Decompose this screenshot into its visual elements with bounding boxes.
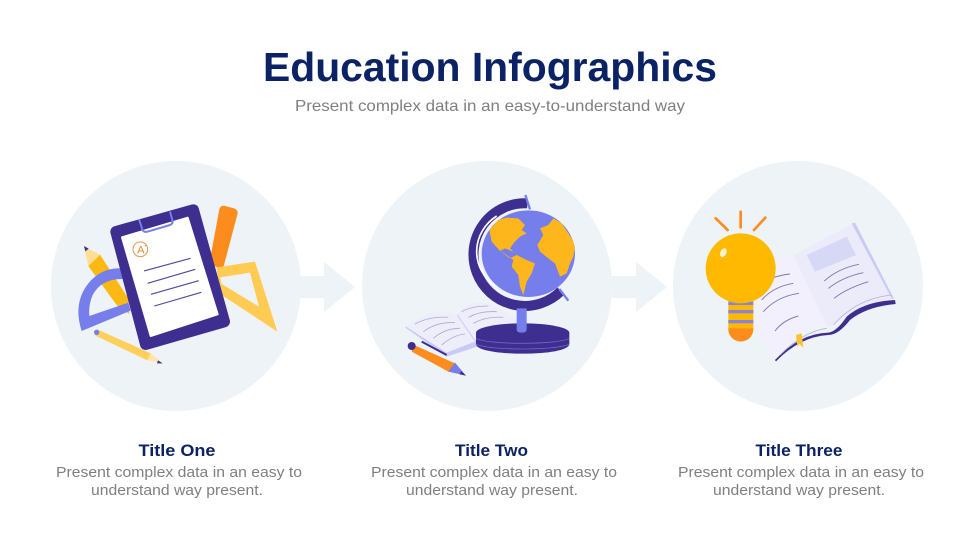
circle background one bbox=[51, 161, 301, 411]
text block: title two bbox=[371, 441, 617, 499]
text block: title one: understand way present. bbox=[91, 483, 263, 499]
text block: title one: Title One bbox=[138, 441, 216, 460]
panel: title two illustration bbox=[362, 161, 612, 411]
icon: small pencil bbox=[94, 329, 163, 363]
icon: bulb rays bbox=[716, 212, 765, 230]
text block: title two: Title Two bbox=[455, 441, 528, 460]
panel: title one illustration bbox=[51, 161, 301, 411]
icon: clipboard: + bbox=[144, 244, 147, 250]
subtitle: Present complex data in an easy-to-understand way bbox=[295, 98, 685, 115]
text block: title one: Present complex data in an easy to bbox=[56, 465, 302, 481]
icon: protractor bbox=[78, 268, 131, 331]
icon: globe base bbox=[476, 308, 569, 354]
icon: orange pen bbox=[408, 342, 466, 376]
text block: title two: Present complex data in an easy to bbox=[371, 465, 617, 481]
icon: yellow pencil bbox=[84, 246, 129, 314]
icon: white gap around globe bbox=[477, 216, 497, 286]
text block: title three: Present complex data in an easy to bbox=[678, 465, 924, 481]
arrow: second to third bbox=[612, 262, 667, 312]
icon: yellow set square bbox=[217, 262, 277, 332]
icon: globe stand arc bbox=[473, 203, 561, 306]
icon: light bulb bbox=[706, 233, 776, 341]
icon: orange ruler bbox=[209, 206, 238, 270]
arrow: first to second bbox=[300, 262, 355, 312]
title: Education Infographics bbox=[263, 44, 717, 90]
text block: title three bbox=[678, 441, 924, 499]
circle background three bbox=[673, 161, 923, 411]
text block: title two: understand way present. bbox=[406, 483, 578, 499]
icon: globe bbox=[482, 210, 575, 297]
icon: open book with bookmark bbox=[753, 223, 896, 361]
panel: title three illustration bbox=[673, 161, 923, 411]
icon: open book bbox=[405, 302, 517, 357]
icon: clipboard bbox=[116, 210, 224, 344]
text block: title three: understand way present. bbox=[713, 483, 885, 499]
icon: clipboard: A bbox=[137, 245, 145, 257]
icon: globe pins bbox=[525, 195, 568, 301]
text block: title one bbox=[56, 441, 302, 499]
circle background two bbox=[362, 161, 612, 411]
text block: title three: Title Three bbox=[756, 441, 842, 460]
